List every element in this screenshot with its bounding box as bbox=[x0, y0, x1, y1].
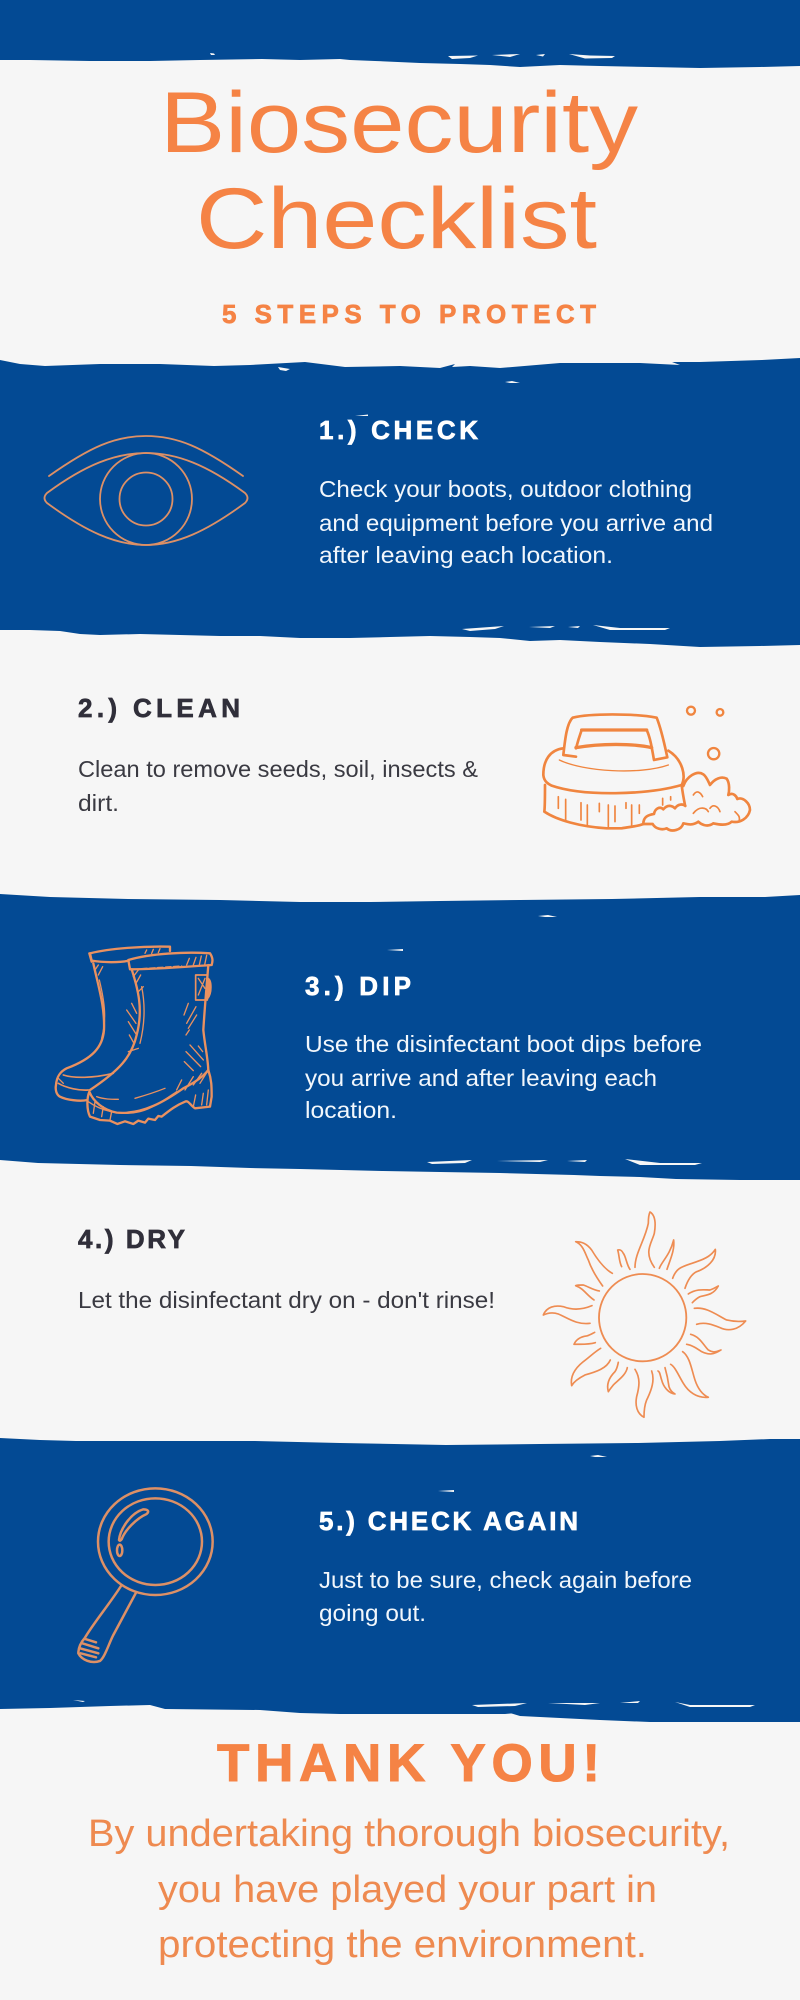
text: step 5 description: Just to be sure, check again before bbox=[319, 1567, 692, 1593]
subtitle: 5 STEPS TO PROTECT bbox=[222, 299, 596, 329]
icon: eye bbox=[44, 436, 248, 545]
text: step 2 description bbox=[78, 756, 478, 816]
text: closing message: protecting the environment. bbox=[158, 1924, 647, 1966]
text: step 1 description: Check your boots, outdoor clothing bbox=[319, 476, 692, 502]
text: step 1 description: after leaving each location. bbox=[319, 542, 613, 568]
text: closing message: By undertaking thorough biosecurity, bbox=[88, 1813, 730, 1855]
text: step 3 description bbox=[305, 1031, 702, 1123]
icon: sun bbox=[543, 1212, 746, 1417]
heading: step 3: 3.) DIP bbox=[305, 971, 411, 1001]
icon: magnifying glass bbox=[78, 1488, 213, 1662]
text: step 3 description: Use the disinfectant boot dips before bbox=[305, 1031, 702, 1057]
panel: step 2 clean bbox=[78, 693, 750, 830]
panel: step 5 check again bbox=[0, 1438, 800, 1722]
panel: step 4 dry bbox=[78, 1212, 746, 1417]
text: step 1 description: and equipment before you arrive and bbox=[319, 510, 713, 536]
text: step 4 description: Let the disinfectant dry on - don't rinse! bbox=[78, 1287, 495, 1313]
panel: top blue band bbox=[0, 0, 800, 68]
title bbox=[160, 75, 638, 267]
heading: step 2: 2.) CLEAN bbox=[78, 693, 240, 723]
panel: step 3 dip bbox=[0, 894, 800, 1180]
heading: step 1: 1.) CHECK bbox=[319, 415, 478, 445]
text: step 2 description: Clean to remove seeds, soil, insects & bbox=[78, 756, 478, 782]
heading: step 5: 5.) CHECK AGAIN bbox=[319, 1506, 578, 1536]
text: closing message: you have played your part in bbox=[158, 1869, 657, 1911]
title: Checklist bbox=[196, 171, 597, 267]
title: Biosecurity bbox=[160, 75, 638, 171]
text: step 3 description: you arrive and after leaving each bbox=[305, 1065, 657, 1091]
text: step 2 description: dirt. bbox=[78, 790, 119, 816]
text: step 3 description: location. bbox=[305, 1097, 397, 1123]
panel: step 1 check bbox=[0, 358, 800, 647]
heading: thank you: THANK YOU! bbox=[217, 1734, 600, 1793]
text: step 5 description: going out. bbox=[319, 1600, 426, 1626]
icon: scrubbing brush with foam bbox=[543, 707, 750, 830]
text: closing message bbox=[88, 1813, 730, 1966]
text: step 1 description bbox=[319, 476, 713, 568]
text: step 5 description bbox=[319, 1567, 692, 1626]
icon: rubber boots bbox=[56, 947, 212, 1124]
heading: step 4: 4.) DRY bbox=[78, 1224, 185, 1254]
